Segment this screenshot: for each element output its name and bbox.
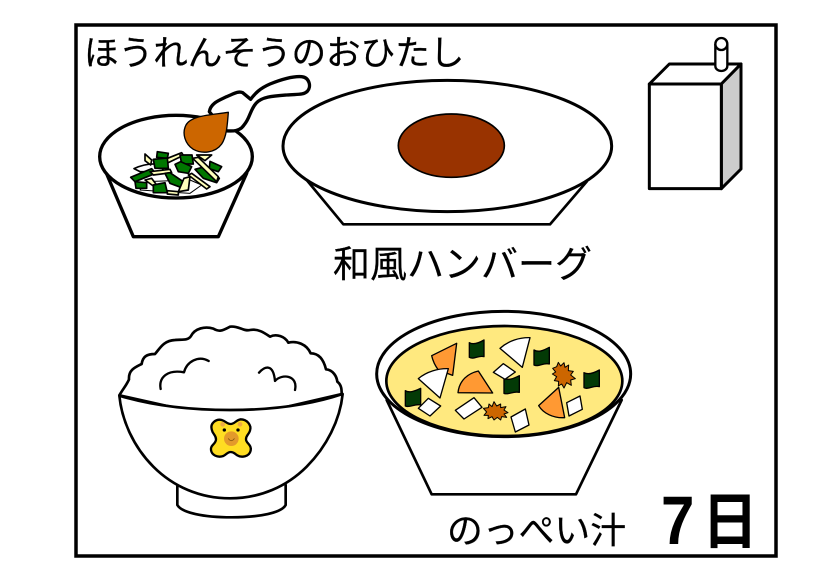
bear ears [220,422,225,427]
bowl body [387,400,622,494]
bowl body [119,394,343,498]
bowl rim [377,311,631,437]
icon: noppei soup bowl [377,311,631,494]
date: 7th [661,482,758,559]
carton side [721,64,741,189]
rice contour left [160,359,209,389]
rice contour right [259,368,295,390]
carton front [649,84,721,189]
plate base [307,180,587,224]
heading: noppei soup: のっぺい汁 [447,511,626,551]
heading: Japanese-style hamburg: 和風ハンバーグ [333,244,592,285]
seaweed pieces [405,340,599,407]
bear logo [211,419,251,457]
frame [76,25,776,556]
sauce drop [184,112,228,152]
heading: spinach ohitashi: ほうれんそうのおひたし [84,35,464,73]
icon: spinach bowl with spoon [100,77,309,237]
straw opening [715,38,727,50]
bear smile [228,439,234,441]
rice mound [119,326,342,420]
bowl body [105,170,247,237]
bear eyes [223,428,226,432]
mushroom pieces [483,362,575,420]
day kanji: 日 [702,489,758,557]
bear muzzle [224,431,239,446]
carton top [649,64,741,84]
tofu pieces [418,364,582,432]
straw [715,44,727,71]
daikon pieces [418,338,530,398]
numeral 7: 7 [661,482,694,559]
icon: milk carton [649,38,741,189]
hamburg steak [398,114,504,177]
spinach and bean sprouts [131,152,222,195]
carrot pieces [432,343,565,418]
soup surface [386,326,622,436]
bowl rim [100,115,252,198]
spoon [209,77,309,131]
bowl foot [177,485,286,517]
icon: rice bowl [119,326,343,517]
plate rim [283,80,612,212]
icon: hamburg steak plate [283,80,612,224]
